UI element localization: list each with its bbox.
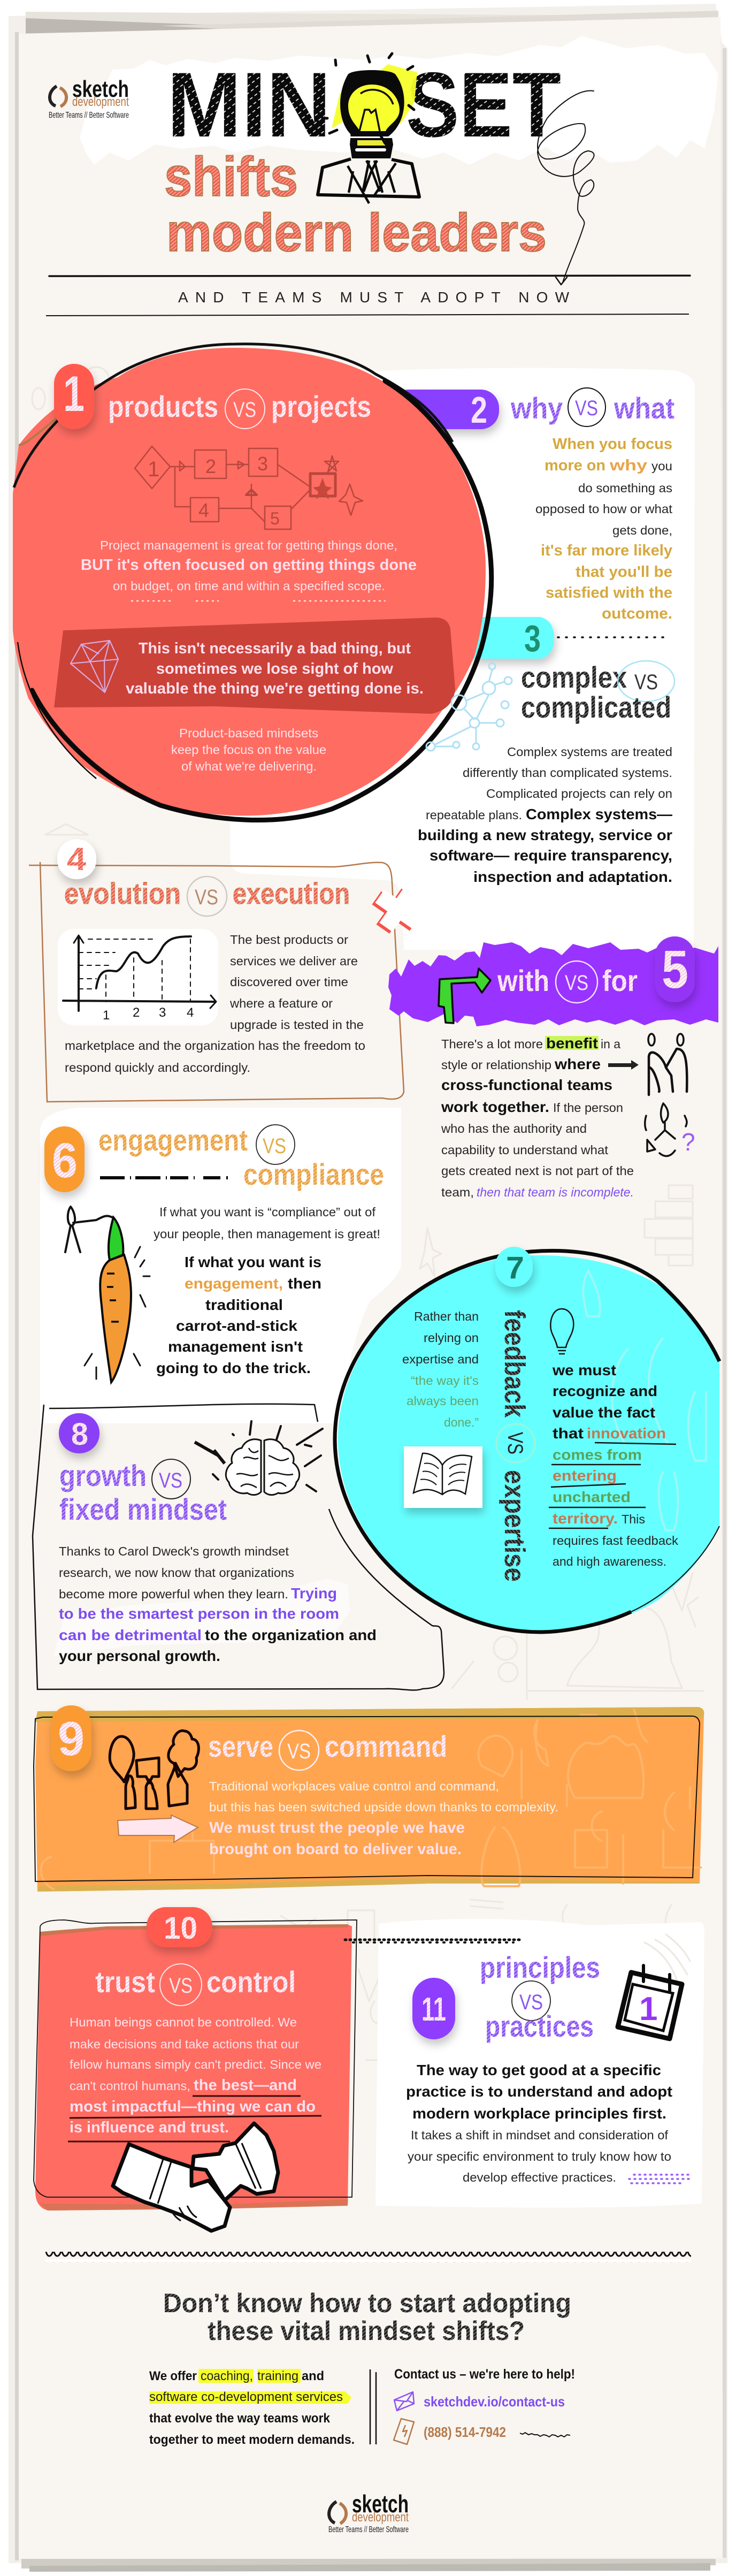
text block: benefit: gets created next is not part of the — [441, 1164, 634, 1178]
logo: sketch development bottom: development — [352, 2510, 409, 2525]
logo: sketch development top: development — [72, 95, 129, 109]
callout: dark red band: sometimes we lose sight of how — [156, 660, 393, 677]
text block: project management: Project management is great for getting things done, — [100, 538, 397, 552]
heading: principles vs practices: principles — [480, 1950, 600, 1984]
text block: best products: marketplace and the organization has the freedom to — [65, 1039, 365, 1053]
badge 5 — [655, 936, 695, 1002]
icon: flow chart sketch: 4 — [198, 499, 209, 521]
text block: best products: upgrade is tested in the — [230, 1018, 364, 1032]
icon: network — [426, 663, 512, 751]
icon: people with speech bubbles — [110, 1731, 198, 1809]
chart: growth curve: 1 — [103, 1008, 110, 1023]
text block: we must recognize: and high awareness. — [553, 1554, 666, 1568]
badge 2: 2 — [471, 389, 487, 431]
text block: when you focus: that you'll be — [576, 563, 672, 581]
white brush behind title — [80, 36, 718, 165]
icon: two people — [648, 1034, 687, 1095]
text block: benefit: work together. — [441, 1099, 549, 1115]
heading: don't know how to start — [163, 2288, 571, 2346]
text block: we must recognize: we must — [552, 1362, 616, 1378]
heading: growth vs fixed mindset: fixed mindset — [59, 1492, 227, 1526]
subtitle band: and teams must adopt now — [46, 276, 690, 316]
text block: compliance: your people, then management is great! — [154, 1227, 380, 1241]
text block: compliance: management isn't — [168, 1338, 303, 1355]
text block: complex systems: building a new strategy, service or — [418, 827, 672, 843]
panel 8: growth vs fixed mindset — [33, 1404, 444, 1690]
text block: benefit: benefit — [546, 1035, 598, 1051]
logo: sketch development bottom — [328, 2490, 409, 2534]
subtitle: shifts modern leaders: shifts — [164, 146, 298, 208]
icon: diamond — [71, 641, 118, 692]
heading: evolution vs execution: evolution — [64, 877, 181, 910]
panel border — [33, 1404, 444, 1690]
heading: don't know how to start: these vital mindset shifts? — [208, 2316, 525, 2346]
text block: complex systems: inspection and adaptation. — [473, 868, 672, 885]
icon: flow chart sketch: 3 — [257, 453, 268, 475]
heading: with vs for: with — [497, 964, 549, 997]
text block: when you focus: it's far more likely — [541, 542, 672, 559]
text block: complex systems: Complex systems— — [526, 806, 672, 822]
badge 4 — [57, 839, 96, 879]
white brush behind text — [53, 1579, 350, 1656]
text block: human beings: can't control humans, — [70, 2079, 190, 2093]
text block: product-based mindsets: keep the focus on the value — [171, 743, 326, 757]
heading: engagement vs compliance: engagement — [98, 1123, 248, 1157]
icon: flow chart sketch — [135, 446, 363, 529]
white backing — [40, 1108, 401, 1423]
subtitle: shifts modern leaders: modern leaders — [166, 203, 547, 263]
text block: the way to get good: The way to get good at a specific — [417, 2062, 661, 2078]
badge 8 — [59, 1413, 99, 1453]
text block: we offer coaching: training — [257, 2369, 298, 2383]
panel 2: why vs what — [510, 388, 674, 622]
badge 5: 5 — [662, 940, 688, 1000]
text block: we must recognize — [549, 1362, 679, 1568]
text block: human beings: is influence and trust. — [70, 2119, 229, 2136]
text block: when you focus: more on — [545, 457, 605, 474]
text block: compliance: going to do the trick. — [156, 1360, 311, 1376]
logo: sketch development top: sketch — [72, 76, 129, 102]
icon: calendar — [618, 1965, 682, 2039]
chart: growth curve: 3 — [159, 1005, 166, 1020]
logo: sketch development top: Better Teams // Better Software — [49, 111, 129, 120]
heading: growth vs fixed mindset: growth — [59, 1459, 147, 1492]
chart: growth curve — [58, 929, 218, 1025]
heading: evolution vs execution — [64, 877, 350, 916]
text block: when you focus: outcome. — [602, 605, 672, 622]
panel 10: trust vs control — [34, 1907, 357, 2231]
callout: dark red band: This isn't necessarily a bad thing, but — [139, 640, 411, 657]
heading: principles vs practices: practices — [485, 2009, 594, 2043]
heading: engagement vs compliance: VS — [263, 1134, 286, 1158]
text block: when you focus: opposed to how or what — [535, 502, 673, 516]
text block: benefit — [441, 1035, 634, 1199]
icon: team triad with question mark: ? — [681, 1128, 695, 1156]
heading: products vs projects: products — [108, 390, 218, 423]
badge 4: 4 — [67, 841, 87, 877]
text block: benefit: team, — [441, 1185, 474, 1199]
text block: compliance: If what you want is “compliance” out of — [159, 1205, 376, 1219]
text block: carol dweck — [59, 1544, 377, 1664]
icon: phone — [394, 2419, 414, 2444]
heading: principles vs practices: VS — [519, 1991, 543, 2014]
icon: green arrow — [439, 969, 490, 1023]
heading: why vs what: what — [614, 391, 674, 425]
heading: feedback vs expertise vertical: expertise — [499, 1470, 531, 1582]
text block: best products: respond quickly and accordingly. — [65, 1061, 250, 1074]
panel 1: products vs projects circle — [13, 344, 492, 820]
text block: rather than: Rather than — [414, 1309, 479, 1323]
contact block: sketchdev.io/contact-us — [424, 2394, 565, 2410]
panel 5: with vs for — [388, 936, 718, 1199]
text block: best products — [65, 933, 365, 1074]
text block: compliance: carrot-and-stick — [176, 1317, 297, 1334]
text block: benefit: cross-functional teams — [441, 1077, 612, 1093]
heading: don't know how to start: Don’t know how to start adopting — [163, 2288, 571, 2318]
text block: complex systems: repeatable plans. — [426, 808, 522, 822]
badge 1 — [54, 364, 94, 429]
title: MINDSET with bulb — [167, 54, 561, 203]
heading: serve vs command: VS — [287, 1740, 311, 1763]
text block: traditional workplaces — [209, 1779, 558, 1858]
wavy divider — [45, 2252, 691, 2262]
text block: we offer coaching: that evolve the way teams work — [149, 2411, 331, 2426]
heading: engagement vs compliance: compliance — [243, 1157, 384, 1191]
badge 7 — [495, 1247, 533, 1287]
heading: complex vs complicated: complicated — [521, 690, 671, 724]
text block: the way to get good: It takes a shift in mindset and consideration of — [411, 2128, 669, 2142]
text block: human beings — [68, 2015, 321, 2141]
panel border — [34, 1920, 357, 2197]
panel border — [29, 862, 404, 1102]
text block: best products: The best products or — [230, 933, 348, 947]
text block: traditional workplaces: brought on board to deliver value. — [209, 1841, 462, 1858]
text block: when you focus: why — [609, 457, 647, 474]
text block: complex systems: software— require transparency, — [430, 847, 672, 864]
callout: dark red band — [54, 618, 455, 714]
text block: when you focus: you — [651, 459, 672, 473]
text block: carol dweck: Thanks to Carol Dweck's growth mindset — [59, 1544, 289, 1558]
heading: engagement vs compliance — [98, 1123, 384, 1191]
logo: sketch development bottom: Better Teams // Better Software — [328, 2525, 409, 2534]
text block: traditional workplaces: We must trust the people we have — [209, 1819, 465, 1836]
faint wavy lines — [645, 1934, 690, 1980]
text block: we offer coaching: coaching, — [201, 2369, 253, 2383]
text block: complex systems — [418, 745, 672, 885]
contact block — [394, 2367, 575, 2444]
heading: growth vs fixed mindset — [59, 1459, 227, 1526]
callout: dark red band: valuable the thing we're getting done is. — [126, 680, 424, 697]
text block: benefit: If the person — [553, 1101, 623, 1115]
heading: evolution vs execution: VS — [195, 886, 218, 909]
text block: we must recognize: comes from — [553, 1446, 642, 1463]
heading: why vs what — [510, 388, 674, 426]
badge 9 — [51, 1705, 91, 1771]
heading: products vs projects: projects — [271, 390, 371, 423]
text block: product-based mindsets: Product-based mindsets — [179, 726, 318, 740]
heading: serve vs command — [208, 1729, 447, 1770]
text block: the way to get good: develop effective practices. — [463, 2170, 616, 2184]
contact block: Contact us – we're here to help! — [394, 2367, 575, 2382]
text block: best products: discovered over time — [230, 975, 348, 989]
chart: growth curve: 4 — [187, 1005, 194, 1020]
heading: with vs for: for — [602, 964, 638, 997]
heading: feedback vs expertise vertical: VS — [503, 1432, 527, 1454]
text block: product-based mindsets: of what we're delivering. — [181, 759, 317, 773]
heading: feedback vs expertise vertical: feedback — [499, 1310, 531, 1418]
heading: with vs for: VS — [565, 971, 588, 995]
text block: project management — [81, 538, 417, 601]
text block: we must recognize: This — [622, 1512, 645, 1526]
text block: compliance — [154, 1205, 380, 1376]
faint background doodles — [32, 367, 703, 2060]
text block: compliance: then — [288, 1275, 321, 1292]
text block: carol dweck: to the organization and — [205, 1627, 377, 1643]
panel 6: engagement vs compliance — [40, 1108, 401, 1423]
title: MINDSET with bulb: SET — [406, 54, 561, 156]
text block: the way to get good: modern workplace principles first. — [412, 2105, 666, 2122]
panel 9: serve vs command — [34, 1705, 704, 1892]
text block: carol dweck: research, we now know that organizations — [59, 1566, 294, 1580]
badge 10: 10 — [164, 1911, 197, 1946]
text block: carol dweck: can be detrimental — [59, 1627, 202, 1643]
text block: compliance: traditional — [205, 1297, 283, 1313]
text block: when you focus: When you focus — [553, 436, 672, 453]
text block: human beings: the best—and — [194, 2077, 297, 2094]
icon: brain — [195, 1421, 323, 1495]
squiggle arrow — [538, 91, 594, 285]
heading: complex vs complicated: complex — [521, 660, 627, 694]
purple brush band — [388, 942, 718, 1026]
chart: growth curve: 2 — [133, 1005, 140, 1020]
icon: red cross — [364, 877, 430, 943]
icon: white arrow — [118, 1815, 198, 1842]
panel 7: feedback vs expertise circle — [335, 1247, 719, 1632]
text block: rather than: expertise and — [402, 1352, 479, 1366]
panel 4: evolution vs execution — [29, 839, 430, 1102]
title: MINDSET with bulb: D — [345, 54, 405, 156]
text block: when you focus — [535, 436, 673, 622]
icon: flow chart sketch: 2 — [205, 455, 216, 477]
icon: envelope — [394, 2392, 414, 2411]
text block: benefit: capability to understand what — [441, 1143, 609, 1157]
text block: the way to get good: practice is to understand and adopt — [406, 2083, 672, 2100]
divider — [370, 2369, 376, 2444]
text block: we must recognize: that — [553, 1425, 584, 1442]
text block: carol dweck: Trying — [291, 1585, 337, 1602]
text block: the way to get good: your specific environment to truly know how to — [408, 2150, 671, 2163]
icon: book card — [404, 1446, 482, 1508]
heading: with vs for — [497, 961, 638, 1003]
text block: the way to get good — [406, 2062, 690, 2184]
heading: growth vs fixed mindset: VS — [159, 1469, 182, 1492]
text block: benefit: There's a lot more — [441, 1037, 543, 1051]
logo: sketch development top — [49, 76, 129, 120]
text block: benefit: who has the authority and — [441, 1122, 587, 1135]
badge 9: 9 — [58, 1712, 85, 1766]
heading: why vs what: VS — [575, 397, 598, 420]
text block: we offer coaching — [149, 2369, 355, 2447]
badge 11 — [412, 1978, 455, 2039]
heading: trust vs control: VS — [169, 1974, 193, 1998]
text block: we must recognize: recognize and — [553, 1383, 657, 1399]
text block: when you focus: satisfied with the — [546, 584, 672, 601]
text block: complex systems: Complex systems are treated — [507, 745, 672, 759]
text block: we must recognize: innovation — [587, 1425, 666, 1442]
icon: carrot with stick figure — [65, 1207, 150, 1382]
faint doodles — [41, 1710, 701, 1889]
text block: benefit: then that team is incomplete. — [477, 1185, 634, 1199]
icon: handshake — [113, 2123, 278, 2231]
badge 10 — [147, 1907, 212, 1947]
badge 3 — [471, 617, 554, 659]
heading: trust vs control: control — [206, 1965, 296, 1999]
heading: complex vs complicated — [521, 660, 674, 724]
icon: team triad with question mark — [645, 1103, 695, 1156]
text block: human beings: make decisions and take actions that our — [70, 2037, 299, 2051]
text block: we must recognize: uncharted — [553, 1489, 631, 1505]
text block: best products: services we deliver are — [230, 954, 358, 968]
subtitle: shifts modern leaders — [164, 146, 547, 263]
heading: feedback vs expertise vertical — [496, 1310, 535, 1582]
text block: carol dweck: become more powerful when they learn. — [59, 1587, 288, 1601]
heading: principles vs practices — [480, 1950, 600, 2043]
panel: white backing for sections 2 and 3 — [230, 368, 695, 950]
text block: human beings: fellow humans simply can't predict. Since we — [70, 2057, 321, 2071]
text block: rather than: “the way it's — [411, 1374, 479, 1388]
text block: traditional workplaces: but this has been switched upside down thanks to complexity. — [209, 1800, 558, 1814]
text block: project management: BUT it's often focused on getting things done — [81, 557, 417, 574]
subtitle band: and teams must adopt now: AND TEAMS MUST ADOPT NOW — [178, 289, 570, 306]
badge 3: 3 — [524, 618, 541, 659]
icon: calendar: 1 — [639, 1991, 657, 2028]
text block: compliance: engagement, — [185, 1275, 283, 1292]
badge 7: 7 — [506, 1251, 524, 1285]
badge 6: 6 — [52, 1133, 78, 1188]
badge 2 — [390, 389, 499, 431]
text block: we offer coaching: and — [302, 2369, 324, 2383]
heading: products vs projects — [108, 389, 371, 429]
icon: small arrow — [608, 1060, 639, 1070]
badge 11: 11 — [421, 1991, 446, 2028]
text block: carol dweck: to be the smartest person in the room — [59, 1605, 339, 1622]
text block: we must recognize: territory. — [553, 1510, 618, 1527]
text block: we offer coaching: We offer — [149, 2369, 197, 2383]
text block: when you focus: gets done, — [612, 523, 672, 537]
text block: we offer coaching: software co-development services — [149, 2390, 343, 2404]
text block: product-based mindsets — [171, 726, 326, 773]
heading: complex vs complicated: VS — [634, 670, 658, 694]
panel 3: complex vs complicated — [418, 637, 674, 885]
text block: project management: on budget, on time and within a specified scope. — [113, 579, 385, 593]
text block: best products: where a feature or — [229, 996, 333, 1010]
logo: sketch development bottom: sketch — [352, 2490, 409, 2518]
heading: products vs projects: VS — [233, 398, 256, 422]
panel 11: principles vs practices — [345, 1919, 704, 2208]
badge 1: 1 — [63, 365, 85, 422]
text block: rather than: relying on — [424, 1331, 479, 1345]
heading: why vs what: why — [510, 391, 563, 425]
heading: serve vs command: serve — [208, 1729, 273, 1763]
text block: complex systems: differently than complicated systems. — [463, 766, 672, 780]
text block: human beings: Human beings cannot be controlled. We — [70, 2015, 297, 2029]
heading: trust vs control: trust — [95, 1965, 155, 1999]
text block: we must recognize: value the fact — [553, 1404, 655, 1421]
text block: we offer coaching: together to meet modern demands. — [149, 2433, 355, 2447]
text block: carol dweck: your personal growth. — [59, 1648, 220, 1664]
icon: light bulb — [550, 1309, 573, 1354]
text block: we must recognize: requires fast feedback — [553, 1534, 679, 1548]
text block: traditional workplaces: Traditional workplaces value control and command, — [209, 1779, 499, 1793]
text block: benefit: in a — [601, 1037, 620, 1051]
text block: when you focus: do something as — [578, 481, 672, 495]
icon: flow chart sketch: 1 — [148, 458, 159, 481]
text block: complex systems: Complicated projects can rely on — [486, 787, 672, 801]
heading: evolution vs execution: execution — [233, 877, 350, 910]
title: MINDSET with bulb: MIN — [167, 54, 331, 156]
text block: rather than: always been — [407, 1394, 479, 1408]
badge 8: 8 — [71, 1417, 88, 1452]
contact block: (888) 514-7942 — [424, 2424, 506, 2440]
heading: trust vs control — [95, 1964, 296, 2006]
panel border — [34, 1716, 700, 1881]
text block: benefit: style or relationship — [441, 1058, 551, 1072]
text block: benefit: where — [554, 1056, 601, 1072]
badge 6 — [44, 1126, 85, 1192]
icon: flow chart sketch: 5 — [270, 509, 280, 528]
heading: serve vs command: command — [325, 1729, 447, 1763]
text block: rather than: done.” — [444, 1415, 479, 1429]
text block: human beings: most impactful—thing we can do — [70, 2098, 316, 2115]
faint bulbs — [583, 1271, 706, 1530]
text block: rather than — [402, 1309, 479, 1429]
text block: compliance: If what you want is — [185, 1254, 321, 1270]
text block: we must recognize: entering — [553, 1467, 617, 1484]
